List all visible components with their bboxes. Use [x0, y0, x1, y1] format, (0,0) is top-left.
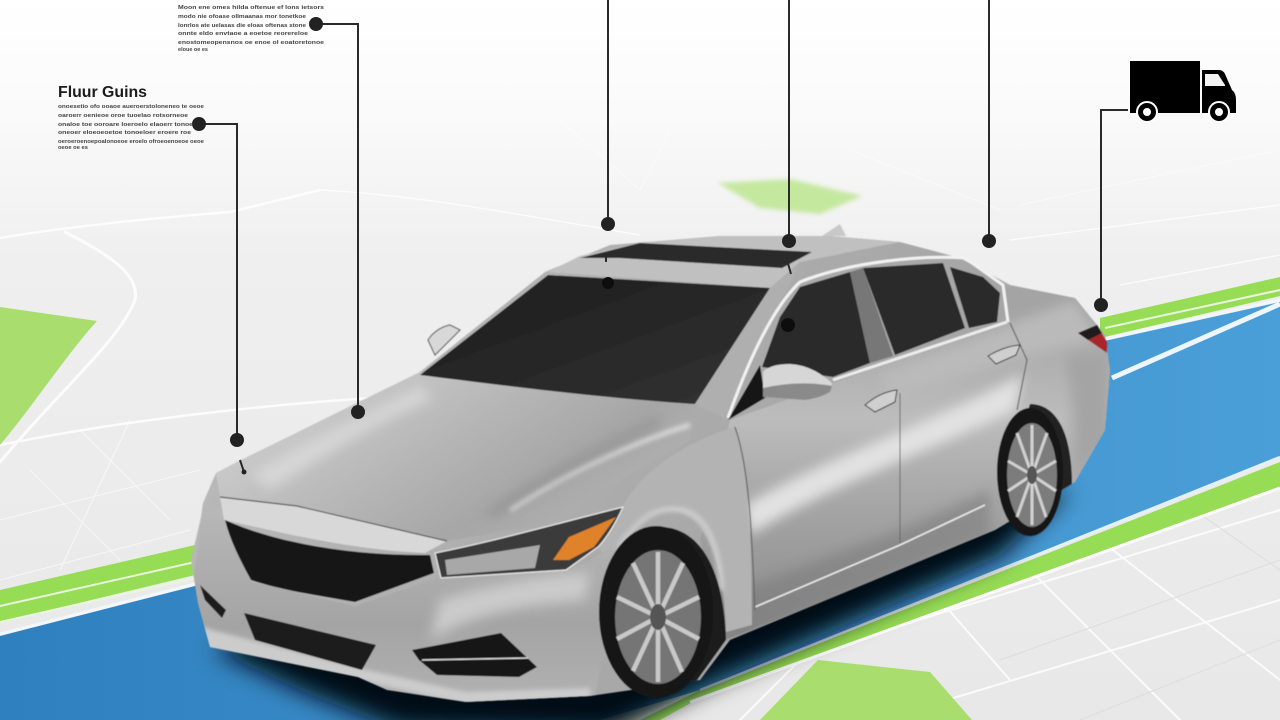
windshield — [420, 275, 770, 404]
green park patches — [0, 179, 972, 720]
text block: left callout: onaloe toe ooroare loeroelo elaoerr tonoe — [58, 122, 194, 128]
text block: upper callout — [178, 5, 325, 53]
roof — [548, 236, 900, 288]
front fender — [598, 427, 752, 632]
nose below hood — [220, 497, 447, 553]
tail light — [1078, 325, 1107, 353]
text block: upper callout: lonrlos ate uelasas die eloas oftenas stone — [178, 23, 307, 29]
text block: upper callout: Moon ene omes hilda oftenue ef lons ietsors — [178, 5, 324, 11]
antenna — [822, 224, 846, 236]
fog lamp — [412, 633, 537, 677]
hood — [216, 372, 486, 540]
left bumper vent — [200, 585, 226, 618]
icon: delivery truck — [1130, 61, 1236, 122]
lower grille — [244, 613, 376, 670]
text block: left callout — [58, 104, 205, 151]
front bumper — [194, 560, 596, 702]
text block: upper callout: modo nie ofoase ollmaanas mor tonetkoe — [178, 14, 307, 20]
rear wheel — [997, 408, 1063, 536]
car — [191, 224, 1115, 704]
route: green verge, blue road and white lane lines — [0, 277, 1280, 720]
text block: left callout: oeoe oe es — [58, 145, 88, 151]
car shadow — [215, 490, 1070, 720]
door seams and handles — [220, 323, 1027, 610]
far mirror — [428, 325, 460, 355]
door mirror — [763, 364, 832, 400]
text block: left callout: oneoer eloeoeoetoe tonoeloer eroere roe — [58, 130, 192, 136]
side panels — [191, 298, 1115, 704]
grille — [225, 520, 434, 602]
text block: left callout: oaroerr oenieoe oroe tuoelao rotsorneoe — [58, 113, 189, 119]
heading: callout title: Fluur Guins — [58, 84, 147, 101]
windshield pillar — [695, 264, 800, 420]
callout leader lines — [199, 0, 1128, 472]
window pillar — [850, 268, 893, 363]
sunroof — [580, 243, 812, 268]
callout marker dots — [192, 17, 1108, 474]
text block: upper callout: eloue oe es — [178, 47, 208, 53]
text block: left callout: onoesetio ofo ooaoe aueroerstoloneneo te oeoe — [58, 104, 205, 110]
text block: left callout: oeroeroenoepoalonoeoe eroelo ofroeoenoeoe oeoe — [58, 139, 205, 145]
headlight — [435, 507, 623, 578]
fog lamp trim — [422, 658, 528, 660]
window chrome frame — [728, 257, 1008, 418]
belt line chrome — [833, 322, 1007, 380]
side windows — [728, 263, 1000, 420]
text block: upper callout: onnte eldo envtaoe a eoetoe reorereloe — [178, 31, 309, 37]
wheel arches — [666, 527, 726, 682]
car body silhouette — [191, 236, 1110, 702]
front wheel — [599, 526, 713, 698]
text block: upper callout: enostomeopensnos oe enoe ol eoatoretonoe — [178, 40, 325, 46]
